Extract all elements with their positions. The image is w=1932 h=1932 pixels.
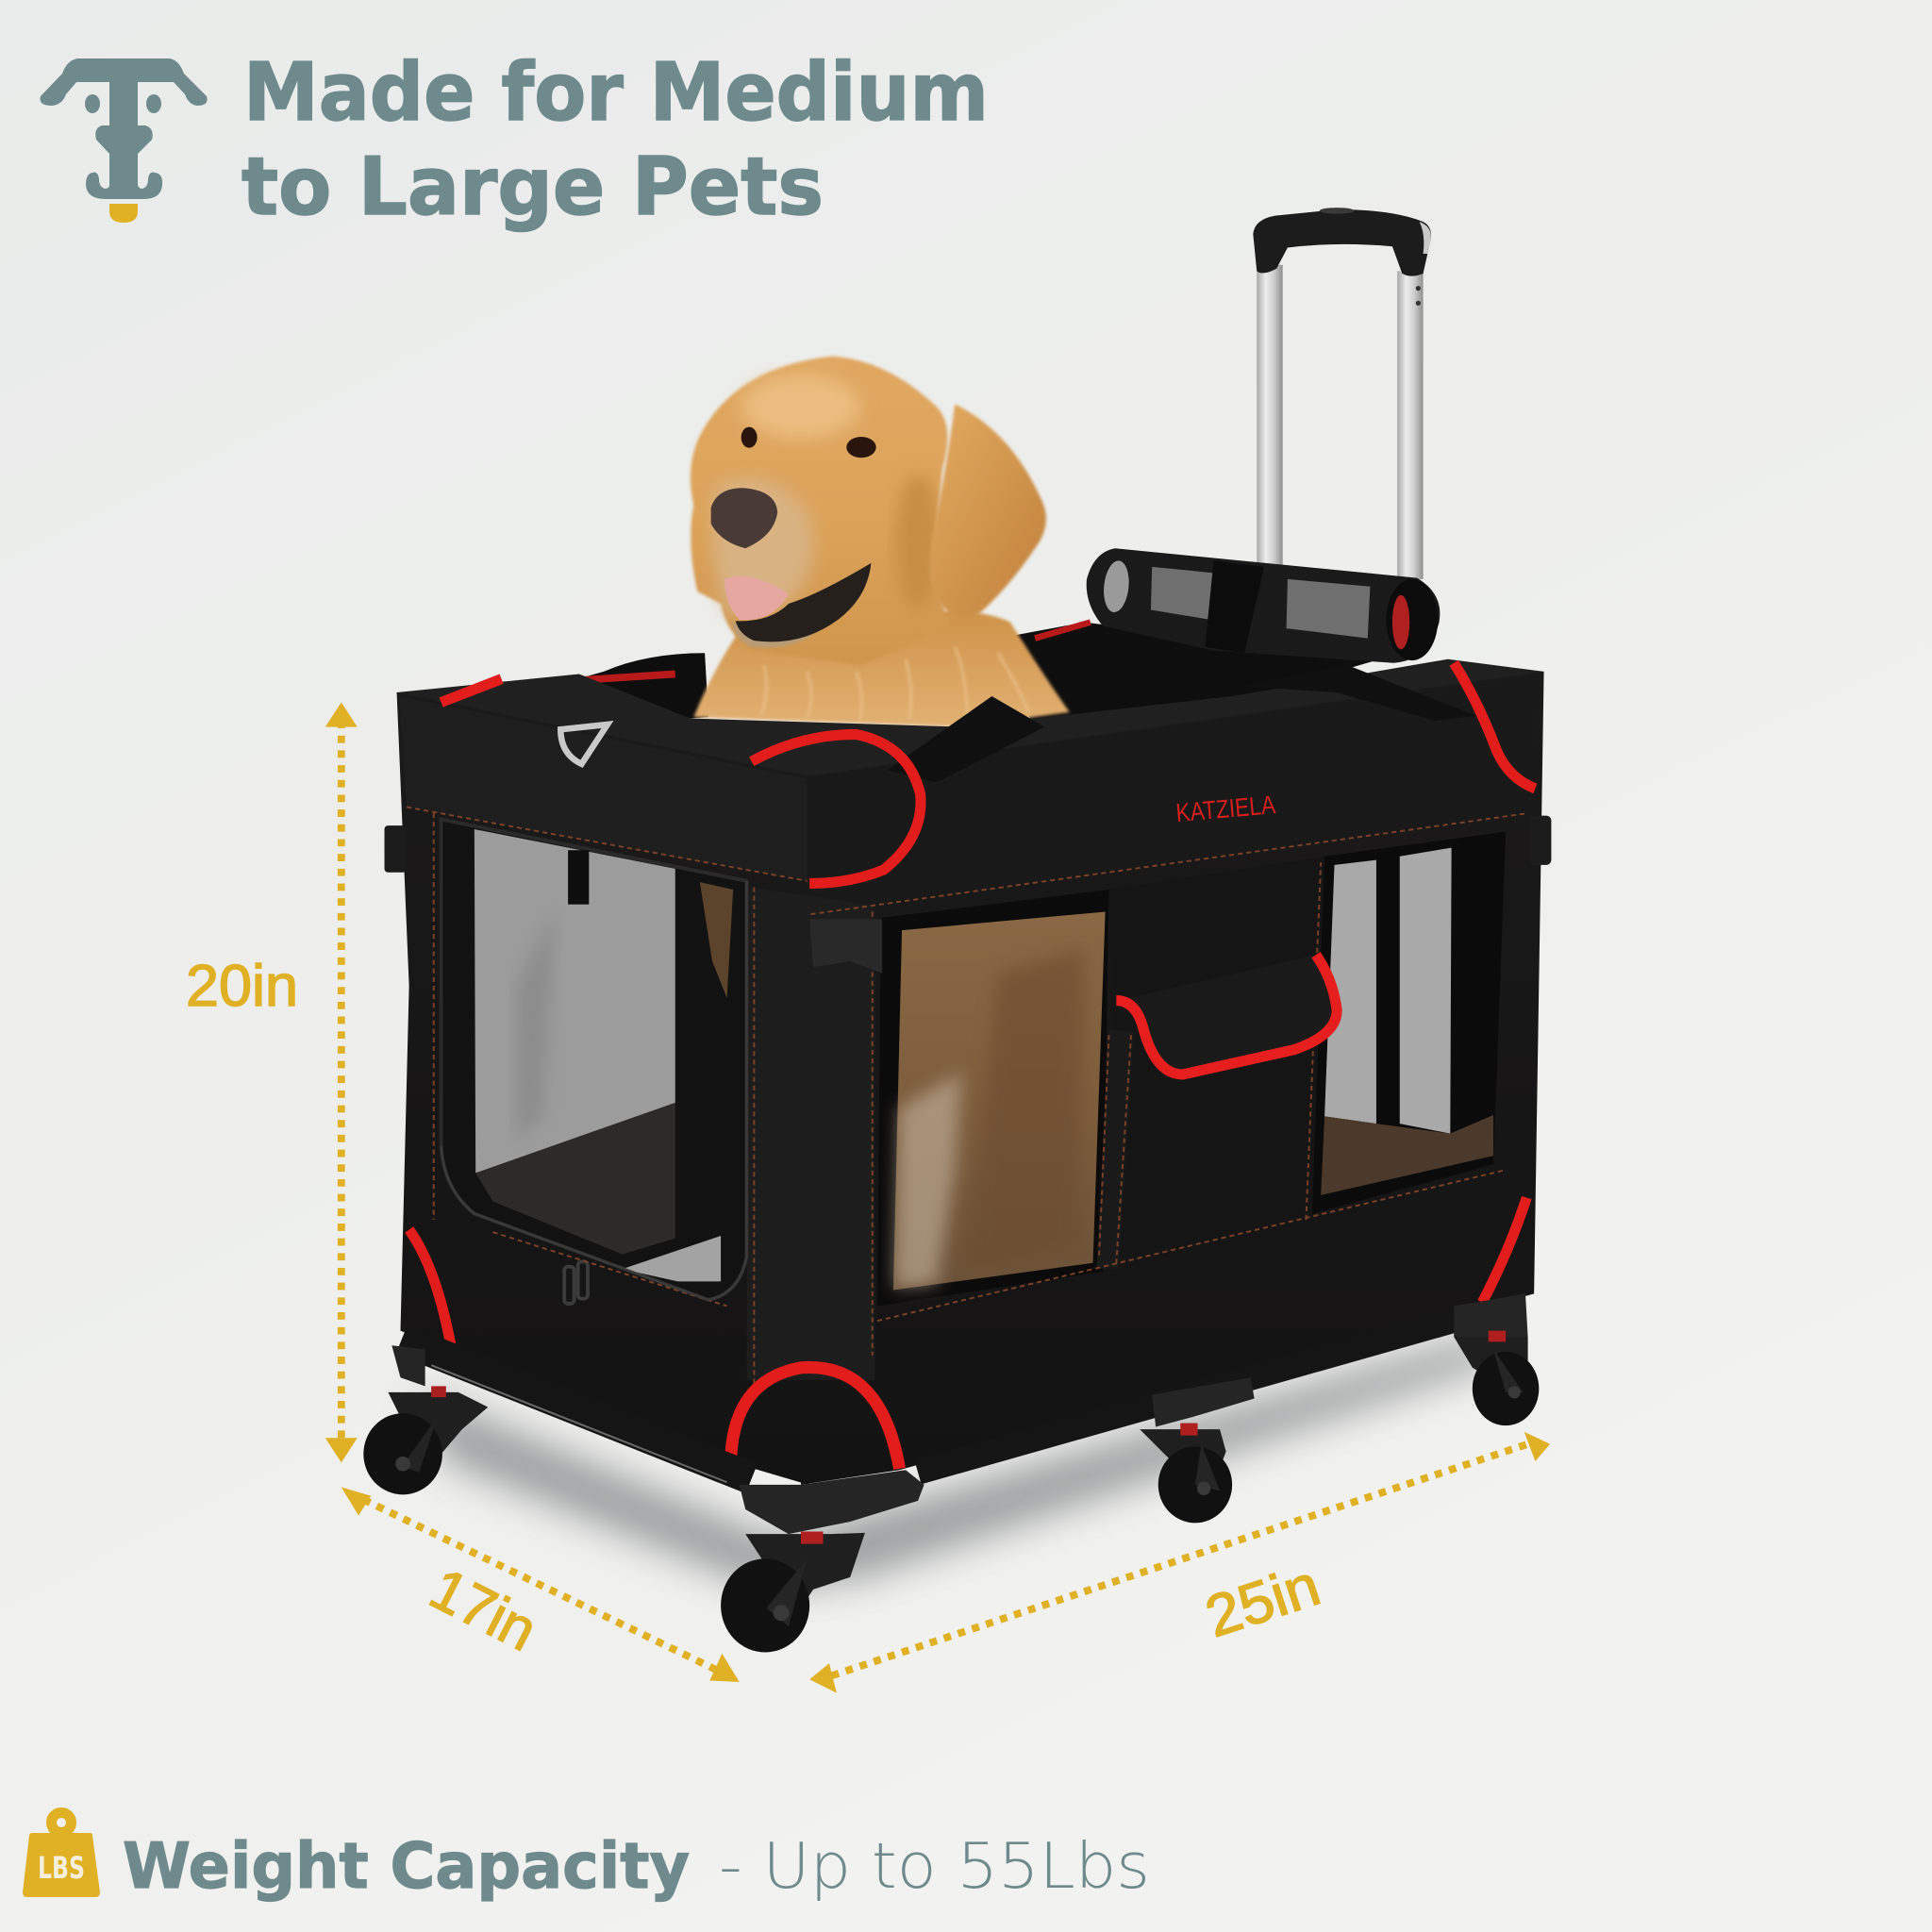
dimension arrow: width <box>809 1432 1550 1693</box>
wheel base frame <box>402 1313 1478 1482</box>
caster: middle <box>1140 1424 1232 1523</box>
shoulder strap <box>887 696 1045 782</box>
icon: dog head <box>40 58 208 223</box>
label: 20in: 20in <box>186 954 298 1019</box>
brand logo: KATZIELA <box>1174 790 1277 827</box>
left window <box>441 820 747 1300</box>
weight capacity text <box>123 1829 1150 1903</box>
pocket flap <box>1116 955 1337 1074</box>
head shape <box>691 356 951 665</box>
left opening with handle strap <box>573 653 708 718</box>
icon: weight <box>23 1813 100 1897</box>
dog chest above carrier <box>693 610 1070 727</box>
right ear <box>930 404 1046 616</box>
carrier <box>385 659 1551 1485</box>
label: 17in: 17in <box>420 1557 547 1664</box>
caster wheels <box>363 1331 1539 1653</box>
caster: front <box>721 1532 865 1653</box>
floor shadow <box>419 1337 1497 1590</box>
centre window <box>877 890 1109 1306</box>
dog head <box>691 356 1046 665</box>
chin <box>732 623 813 647</box>
telescopic handle <box>1253 208 1431 579</box>
rolled mesh mat <box>1087 548 1440 663</box>
title <box>242 46 989 234</box>
right face <box>801 672 1544 1485</box>
eyes <box>741 427 758 448</box>
side buckle <box>809 919 882 974</box>
zipper <box>564 1261 588 1304</box>
caster: rear right <box>1454 1331 1539 1425</box>
stitching <box>407 808 1528 1392</box>
top face <box>397 659 1544 789</box>
red corner trims <box>409 663 1535 1469</box>
caster: rear left <box>363 1386 488 1494</box>
left upper band highlight <box>399 696 808 881</box>
product photo: pet carrier with dog <box>363 208 1551 1653</box>
chest fur streaks <box>761 647 1029 720</box>
dimension arrow: depth <box>341 1487 740 1682</box>
window frame outline <box>441 881 747 1300</box>
rear interior of carrier <box>986 623 1380 727</box>
nose <box>711 488 777 548</box>
label: 25in: 25in <box>1198 1553 1327 1650</box>
mouth <box>736 563 871 641</box>
D-ring clip <box>560 724 608 764</box>
weight capacity text: Weight Capacity <box>123 1829 690 1903</box>
title: to Large Pets <box>242 141 824 234</box>
muzzle <box>711 478 814 616</box>
red lip inside opening <box>581 674 675 680</box>
right window <box>1312 832 1506 1214</box>
rear red trim <box>1035 623 1091 639</box>
corner strip shade <box>747 887 874 1380</box>
weight capacity text: - Up to 55Lbs <box>719 1829 1150 1903</box>
left face <box>397 692 810 1485</box>
cheek shade <box>896 475 941 610</box>
right upper band <box>808 675 1541 912</box>
side loops <box>385 816 1551 873</box>
tongue <box>724 576 789 620</box>
icon: weight: LBS <box>38 1850 85 1886</box>
centre panel with pocket <box>1096 857 1324 1269</box>
title: Made for Medium <box>243 46 989 140</box>
forehead highlight <box>741 375 860 439</box>
corner joints <box>391 1293 1528 1534</box>
dimension arrow: height <box>325 702 358 1462</box>
